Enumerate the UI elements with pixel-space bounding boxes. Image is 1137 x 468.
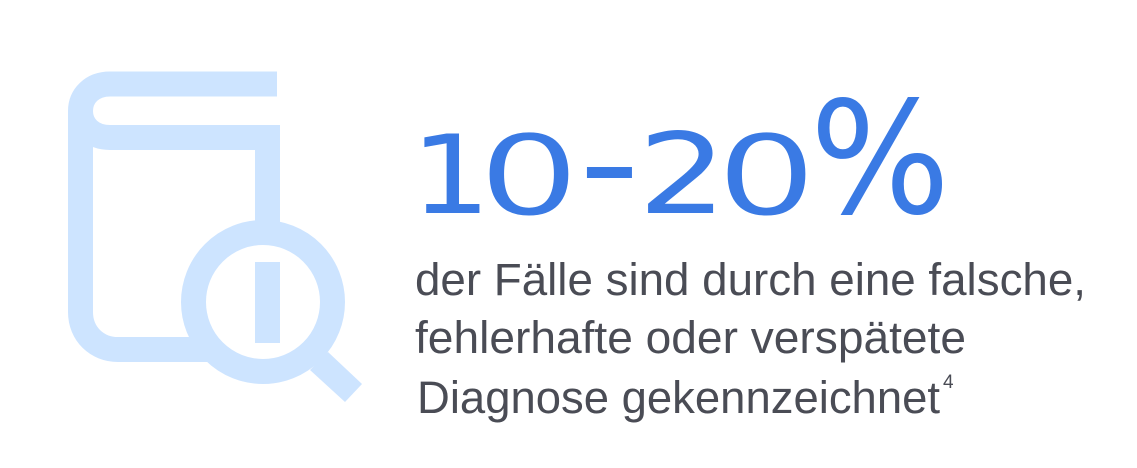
icon: magnifier lens [194, 232, 332, 372]
headline figure: 0 [717, 112, 816, 241]
description text: 4 [943, 372, 954, 393]
headline figure: % [810, 68, 950, 250]
headline figure: - [579, 83, 640, 243]
description text: der Fälle sind durch eine falsche, [415, 254, 1086, 305]
headline figure [410, 68, 950, 250]
description text [415, 254, 1086, 423]
icon: magnifier handle [310, 352, 362, 402]
headline figure: 1 [410, 113, 491, 239]
description text: Diagnose gekennzeichnet [417, 372, 941, 423]
icon: book with magnifying glass [80, 84, 362, 402]
icon: book outline [80, 84, 277, 350]
icon: exclamation bar [255, 262, 280, 343]
headline figure: 2 [638, 109, 727, 239]
description text: fehlerhafte oder verspätete [415, 312, 966, 363]
headline figure: 0 [478, 112, 579, 241]
